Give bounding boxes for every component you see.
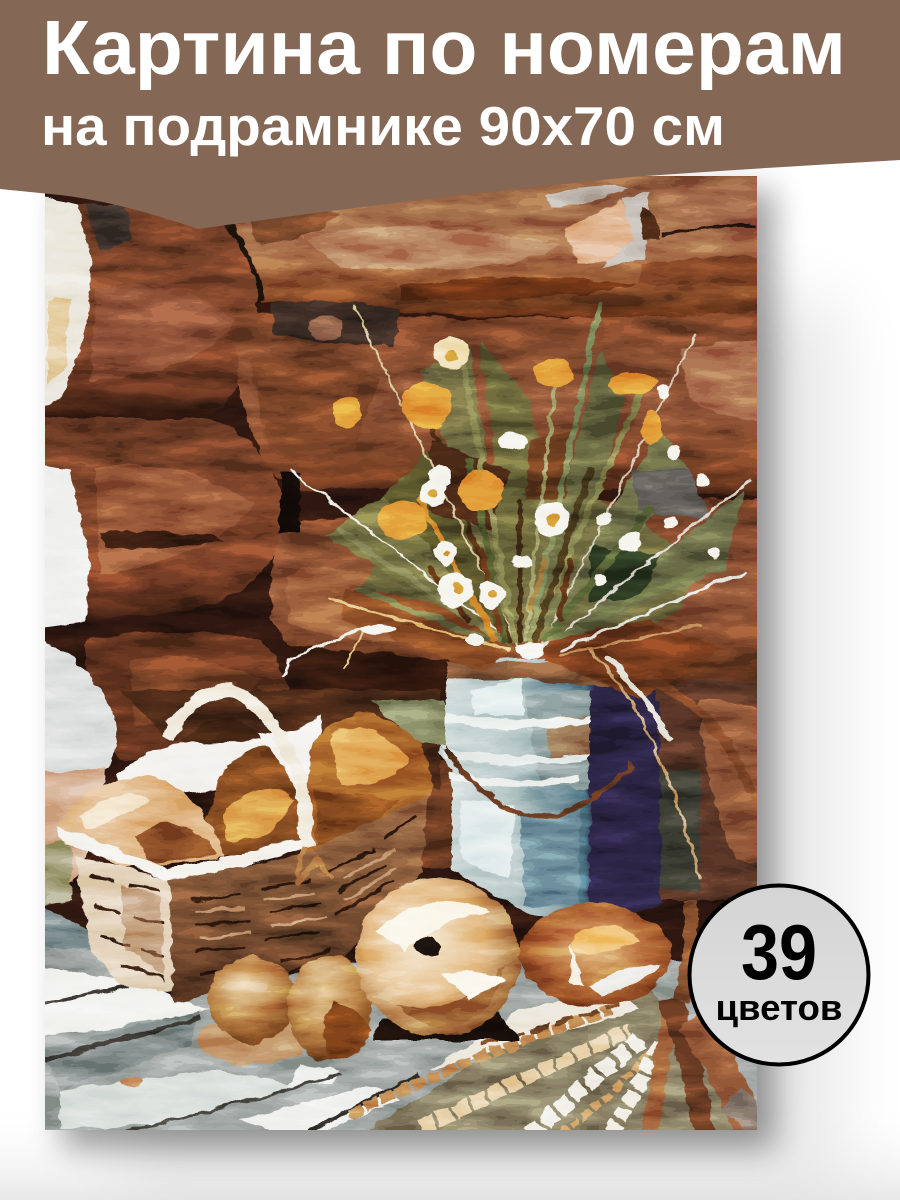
- yellow flowers: [333, 358, 662, 539]
- pastries: rolls and bagels: [197, 878, 671, 1064]
- wheat ears on table: [348, 900, 757, 1130]
- badge: 39 colours: 39: [741, 908, 817, 996]
- white daisies: [362, 336, 719, 657]
- paint mottle texture: [45, 176, 757, 1130]
- white birch edge on logs: [40, 196, 116, 905]
- log wall: [40, 170, 790, 900]
- drooping wheat beside can: [590, 650, 750, 880]
- background wedge behind handle: [120, 690, 440, 790]
- subtitle: на подрамнике 90х70 см: [41, 95, 725, 157]
- bouquet of wildflowers: [285, 305, 750, 700]
- milk can: [437, 657, 662, 918]
- badge: 39 colours: [690, 886, 868, 1064]
- header banner: [0, 0, 900, 229]
- daisy centres: [428, 350, 558, 599]
- title: Картина по номерам: [42, 5, 846, 91]
- wicker basket with bread: [58, 690, 445, 1003]
- wooden table: [45, 908, 757, 1130]
- painting: bread and wildflowers still life: [45, 176, 757, 1130]
- badge: 39 colours: цветов: [716, 987, 842, 1028]
